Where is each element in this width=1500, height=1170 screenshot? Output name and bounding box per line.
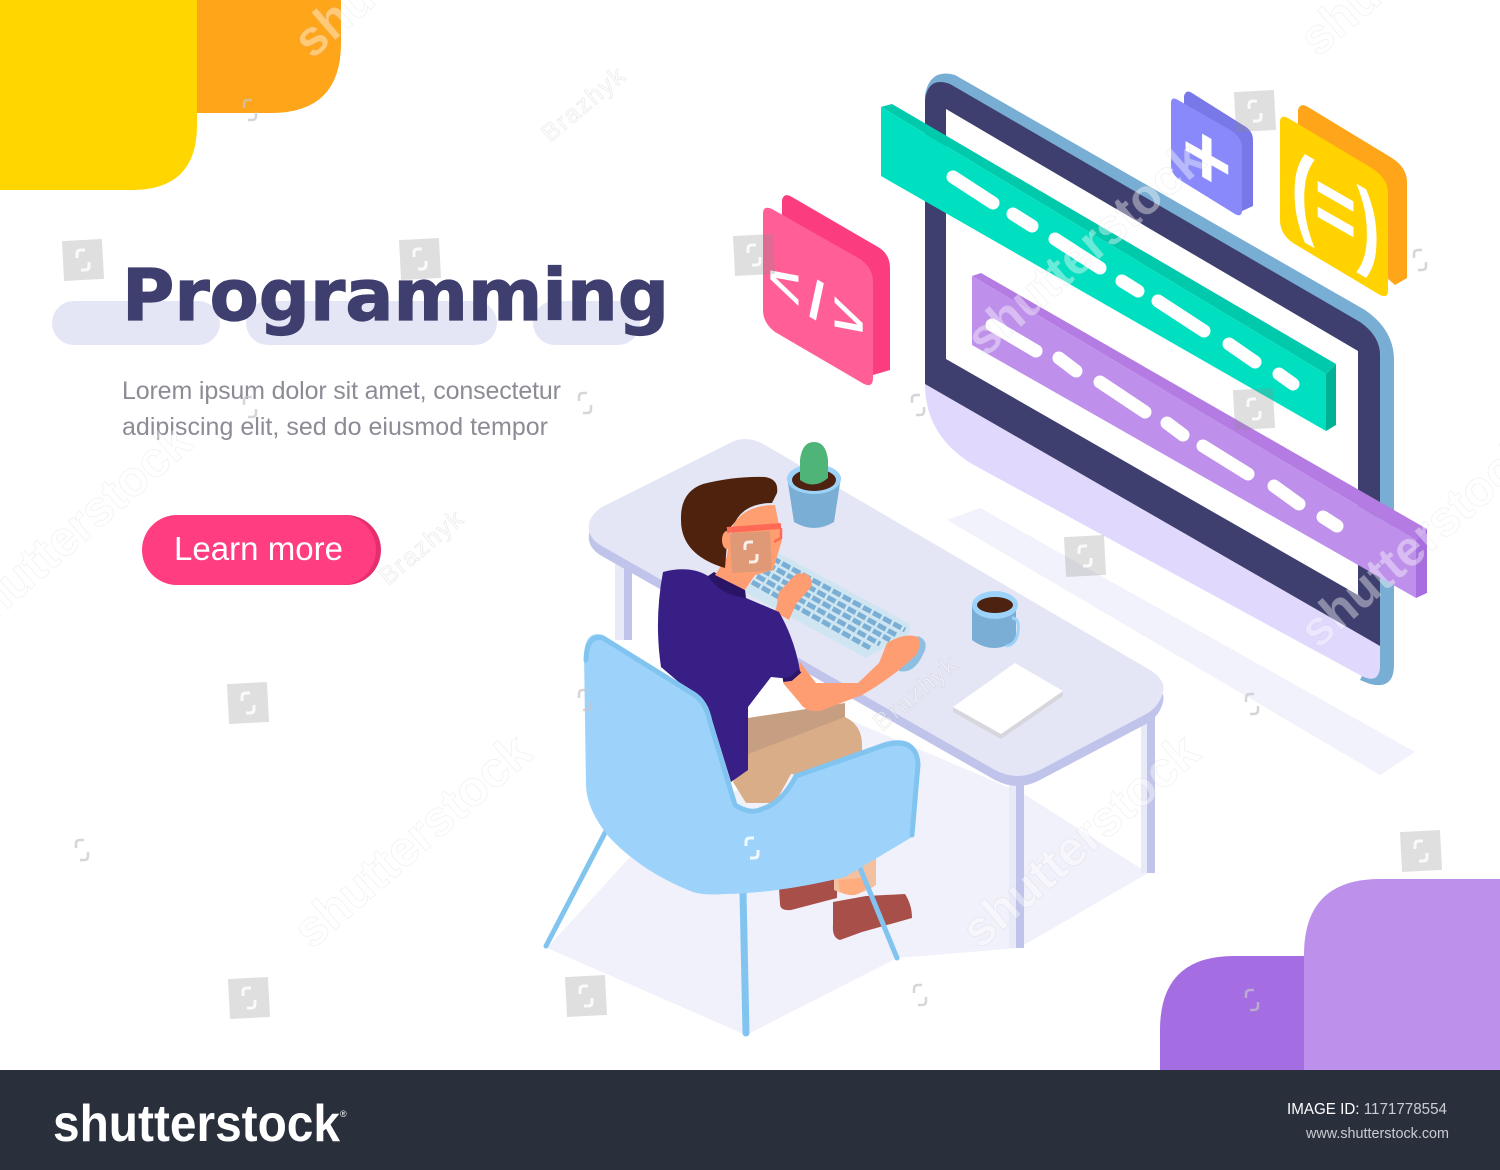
- body text: Lorem ipsum dolor sit amet, consectetur: [122, 377, 561, 405]
- watermark swirls on white: [76, 100, 1426, 1010]
- monitor base: [925, 384, 1380, 679]
- purple bar dashes: [992, 325, 1337, 526]
- chair rim: [586, 637, 918, 835]
- watermark author: [374, 62, 963, 737]
- watermark author: Brazhyk: [374, 505, 469, 591]
- monitor rim: [925, 74, 1394, 685]
- title with highlight pills: [52, 254, 669, 345]
- watermark text: shutterstock: [955, 130, 1215, 366]
- mouse: [895, 636, 926, 672]
- corner shape: light purple: [1304, 879, 1500, 1070]
- neck: [715, 555, 755, 590]
- footer image id: IMAGE ID: 1171778554: [1287, 1101, 1447, 1118]
- desk top: [589, 439, 1163, 786]
- icon: equals in brackets card: (=): [1291, 129, 1380, 286]
- sleeve cuff: [783, 671, 800, 680]
- person: [658, 477, 920, 940]
- footer registered mark: ®: [340, 1109, 347, 1119]
- floor shadow: monitor: [947, 508, 1415, 775]
- body text: [122, 377, 561, 441]
- monitor bezel: [925, 82, 1380, 646]
- title highlight pills: [52, 301, 640, 345]
- pot: [787, 477, 841, 528]
- keyboard: [744, 551, 910, 658]
- watermark author: Brazhyk: [536, 62, 631, 148]
- hair: [681, 477, 777, 568]
- watermark author: Brazhyk: [868, 651, 963, 737]
- icon: plus card: +: [1182, 96, 1232, 219]
- icon: plus card: [1171, 92, 1253, 219]
- trousers: [748, 703, 845, 760]
- footer bar: [0, 1070, 1500, 1170]
- ankles: [834, 855, 876, 894]
- chair: [546, 634, 920, 1033]
- footer logo: shutterstock: [53, 1095, 340, 1153]
- code bar: purple: [972, 273, 1427, 598]
- button: learn more: Learn more: [174, 530, 343, 567]
- chair legs: [546, 829, 897, 1033]
- code bar: green: [881, 104, 1336, 431]
- notebook: [953, 663, 1063, 739]
- desk legs: [615, 560, 1155, 948]
- chair body: [584, 634, 920, 894]
- green bar dashes: [953, 177, 1293, 384]
- body text: adipiscing elit, sed do eiusmod tempor: [122, 413, 548, 441]
- face: [725, 505, 782, 578]
- glasses: [727, 526, 781, 542]
- shoes: [779, 870, 912, 940]
- watermark text: shutterstock: [950, 722, 1210, 958]
- icon: code tag card: [763, 195, 890, 385]
- icon: equals in brackets card: [1280, 105, 1407, 296]
- keyboard keys: [752, 558, 905, 648]
- cactus: [800, 442, 828, 485]
- watermark swirls: [77, 101, 1427, 1008]
- title text: Programming: [122, 254, 669, 337]
- icon: code tag card: </>: [768, 241, 873, 364]
- collar: [708, 572, 746, 598]
- monitor: [925, 74, 1394, 685]
- ear: [722, 531, 732, 549]
- corner shape: orange: [190, 0, 341, 113]
- footer website: www.shutterstock.com: [1305, 1126, 1449, 1142]
- far arm: [775, 573, 812, 620]
- watermark squares: [62, 90, 1442, 1019]
- plant pot with cactus: [787, 442, 841, 528]
- near arm and hand: [783, 635, 920, 711]
- mug: [972, 591, 1018, 648]
- watermark text: shutterstock: [282, 722, 542, 958]
- button: learn more: [142, 515, 381, 585]
- floor shadow: desk and chair: [547, 720, 1148, 1035]
- corner shape: dark purple: [1160, 956, 1320, 1070]
- shirt: [658, 569, 800, 782]
- corner shape: yellow: [0, 0, 197, 190]
- monitor screen: [946, 109, 1358, 595]
